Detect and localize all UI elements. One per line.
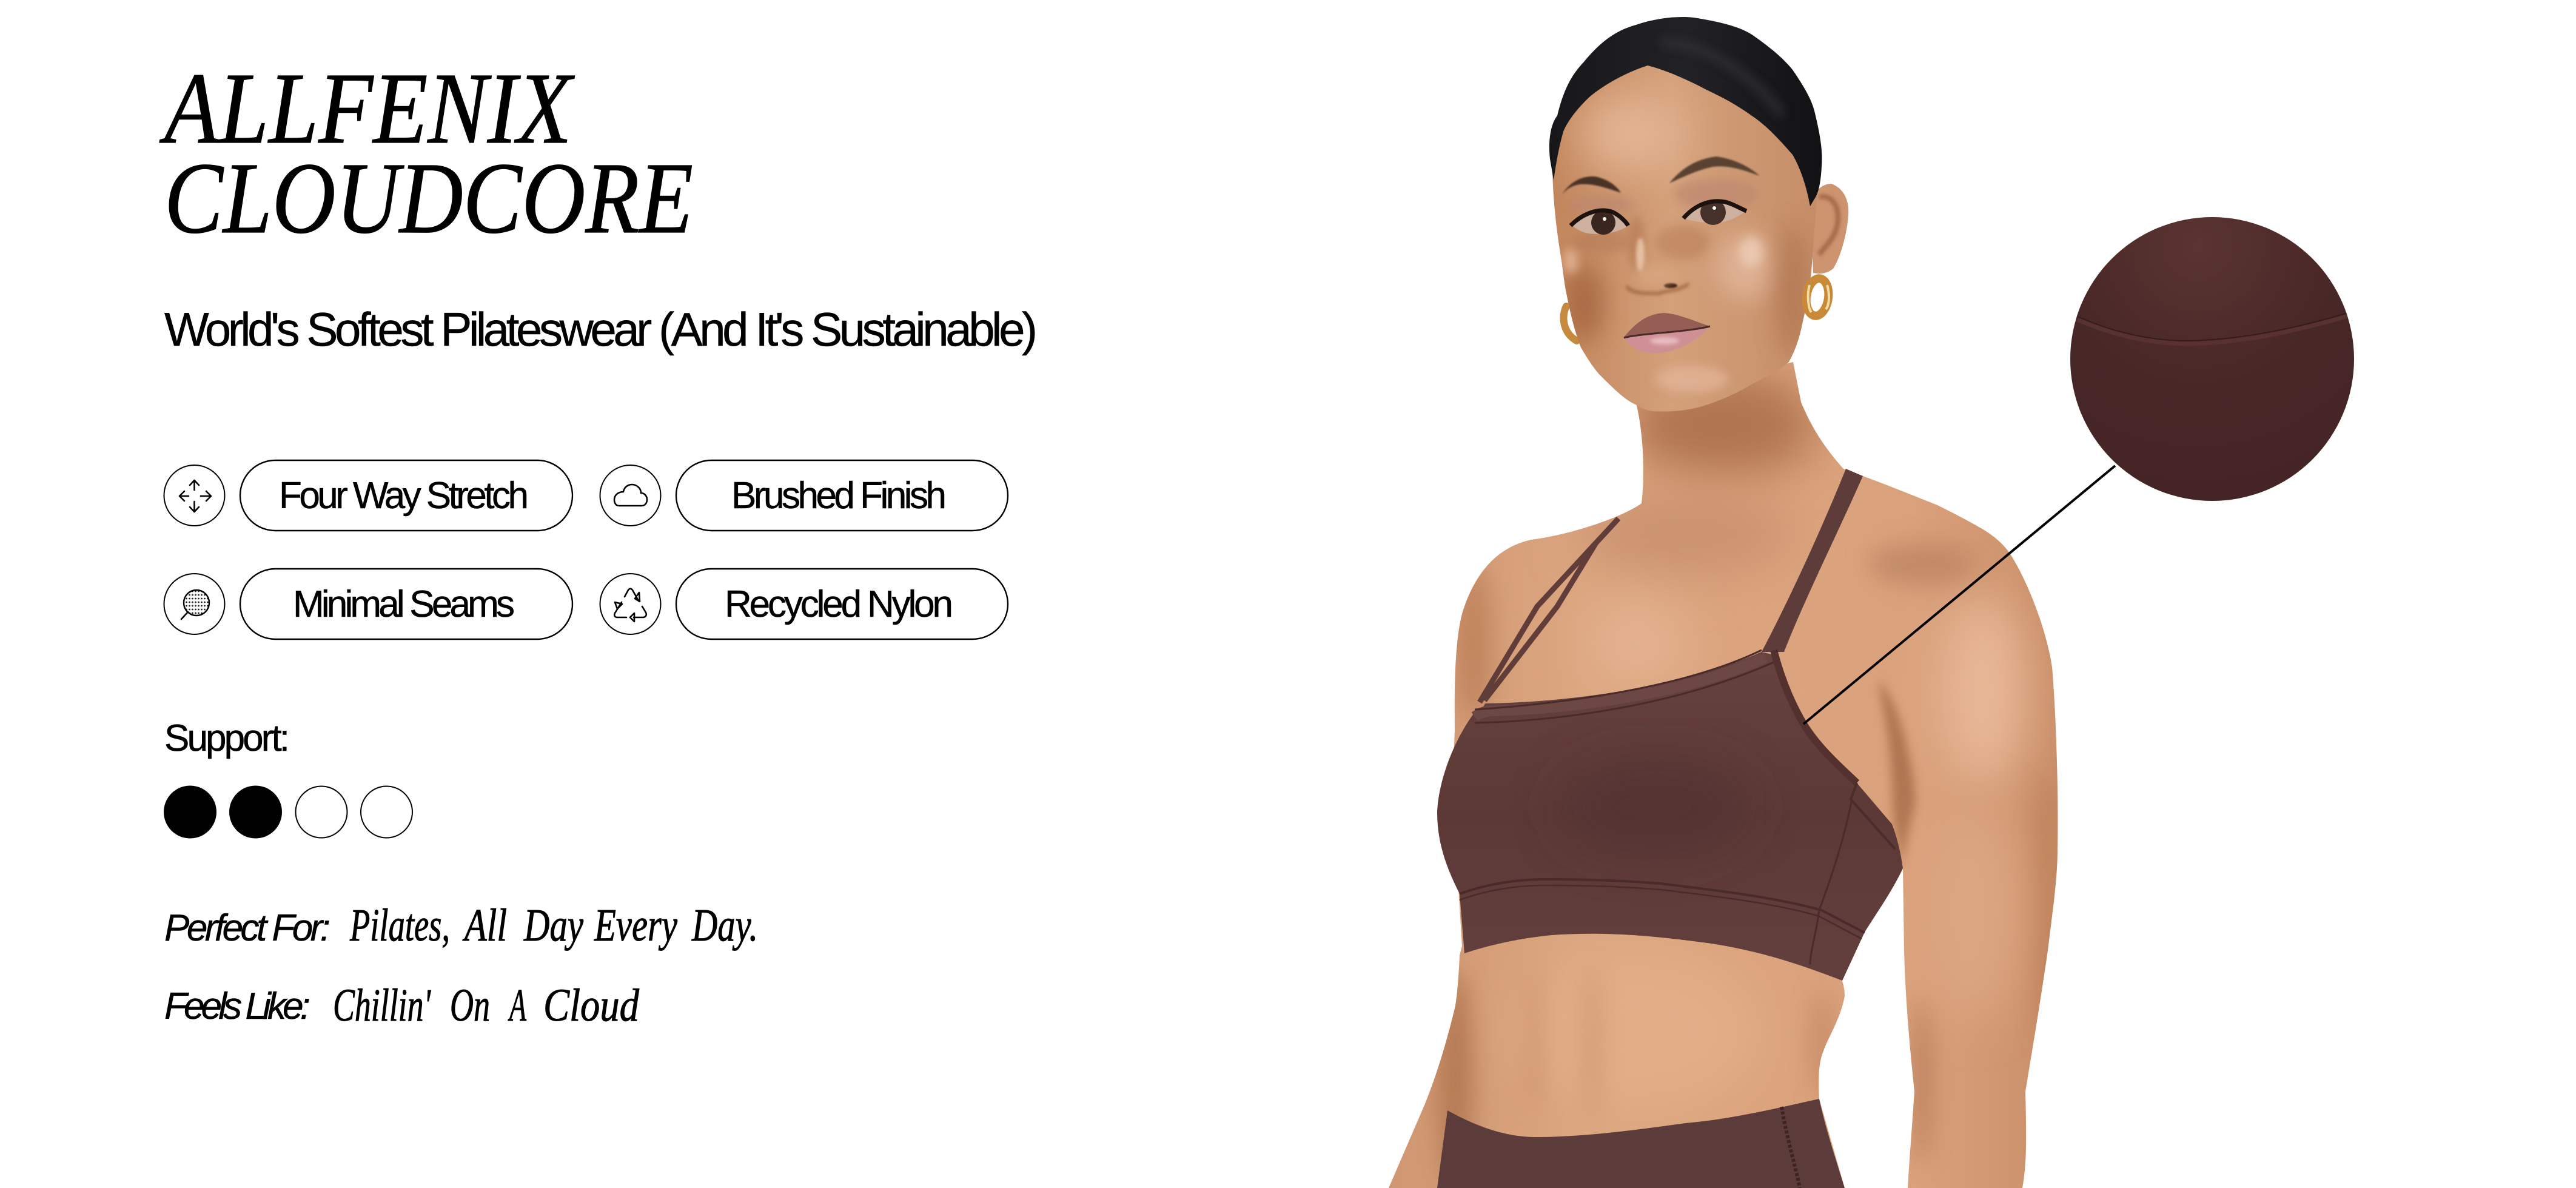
pill label: Recycled Nylon [725, 583, 953, 625]
perfect for line: All [462, 900, 507, 951]
feels like line: On [450, 980, 490, 1031]
pill label: Four Way Stretch [279, 475, 529, 517]
side seam [1810, 799, 1852, 964]
pill label [240, 460, 572, 531]
feels like line [164, 980, 640, 1031]
right strap [1762, 469, 1863, 652]
feels like line: Feels Like: [164, 985, 310, 1027]
perfect for line: Pilates, [349, 900, 450, 951]
nose [1626, 238, 1689, 294]
bra body [1437, 652, 1903, 981]
perfect for line [164, 900, 758, 951]
feels like line: Cloud [543, 980, 640, 1031]
back strap panel [1851, 783, 1895, 849]
eye: left [1571, 210, 1628, 235]
eyebrows [1561, 156, 1760, 195]
eye: right [1683, 200, 1746, 225]
neckline seam [1475, 650, 1774, 723]
face [1552, 65, 1817, 411]
pants [1437, 1099, 1845, 1188]
pill label [676, 460, 1008, 531]
neckline binding [1475, 657, 1766, 717]
side binding [1774, 650, 1857, 783]
perfect for line: Day. [691, 900, 758, 951]
fabric seam [2078, 316, 2348, 344]
title: ALLFENIX [159, 52, 575, 165]
icon: four way arrows [164, 465, 224, 526]
feature: recycled nylon [600, 569, 1008, 639]
body skin [1364, 358, 2092, 1188]
earring behind face [1564, 306, 1577, 341]
pill label [676, 569, 1008, 639]
hair shine [1662, 42, 1783, 115]
ear [1810, 184, 1848, 274]
support label: Support: [164, 717, 290, 759]
pill label: Brushed Finish [731, 475, 947, 517]
bra shading [1558, 758, 1753, 855]
photo: model in brown sports bra [1364, 17, 2354, 1188]
feature: minimal seams [164, 569, 572, 639]
pill label [240, 569, 572, 639]
icon: cloud [600, 465, 661, 526]
feels like line: A [508, 980, 526, 1031]
lips [1624, 313, 1710, 354]
pill label: Minimal Seams [293, 583, 515, 625]
title [159, 52, 693, 255]
bra [1437, 469, 1903, 981]
perfect for line: Every [594, 900, 677, 951]
feels like line: Chillin' [333, 980, 431, 1031]
hair [1549, 17, 1822, 206]
left thin straps [1480, 518, 1618, 702]
fabric zoom circle [2070, 217, 2354, 501]
perfect for line: Day [523, 900, 583, 951]
support rating dots [164, 786, 412, 838]
feature: four way stretch [164, 460, 572, 531]
title: CLOUDCORE [164, 142, 693, 255]
feature: brushed finish [600, 460, 1008, 531]
icon: recycle arrows [600, 574, 661, 634]
band top seam [1460, 879, 1865, 933]
subtitle: World's Softest Pilateswear (And It's Sustainable) [164, 303, 1038, 356]
earring right [1804, 277, 1831, 317]
icon: mesh magnifier [164, 574, 224, 634]
callout line [1803, 466, 2115, 724]
perfect for line: Perfect For: [164, 907, 330, 949]
